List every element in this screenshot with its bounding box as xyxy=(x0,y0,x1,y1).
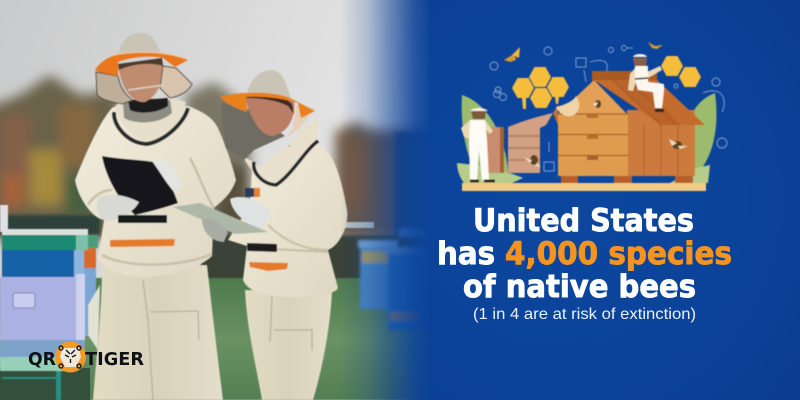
headline xyxy=(437,203,732,305)
illustration: bee flying top left xyxy=(504,47,520,62)
headline line 2: 4,000 species: 4,000 species xyxy=(505,236,732,272)
standing keeper: arms xyxy=(461,120,493,140)
hive: flap xyxy=(553,105,558,125)
woman: collar band xyxy=(254,141,318,185)
subheading: (1 in 4 are at risk of extinction) xyxy=(473,306,696,323)
man: orange strip xyxy=(110,239,175,247)
headline line 3: of native bees xyxy=(463,269,696,305)
standing keeper: overalls xyxy=(469,120,489,180)
illustration: line icons xyxy=(490,46,727,171)
illustration: ground platform xyxy=(462,183,706,191)
illustration: opened hive boxes xyxy=(487,113,553,173)
illustration: bee on hive xyxy=(669,139,688,149)
roof keeper: overalls xyxy=(635,66,664,108)
woman: neck skin xyxy=(288,144,291,147)
man: black collar band xyxy=(114,108,188,144)
logo: wordmark TIGER: TIGER xyxy=(85,349,144,370)
woman: jacket xyxy=(228,143,347,297)
man: jacket xyxy=(75,106,236,277)
roof keeper: veil and face xyxy=(633,58,647,68)
woman: veil xyxy=(222,103,285,160)
illustration: hive xyxy=(553,71,705,183)
man: trousers xyxy=(93,265,223,400)
woman: trousers xyxy=(245,290,332,400)
woman: chest pen pocket xyxy=(245,188,258,197)
man: hat brim xyxy=(95,52,188,76)
illustration: honey curl xyxy=(556,96,579,116)
man: left glove xyxy=(152,159,182,194)
logo: orange tiger badge xyxy=(55,342,86,372)
hive: roof xyxy=(594,80,705,125)
man: face xyxy=(118,62,163,102)
person behind the man xyxy=(88,285,100,350)
man: hat crown xyxy=(118,32,160,54)
woman in bee suit xyxy=(173,70,347,400)
logo: QR TIGER xyxy=(28,342,144,372)
woman: right glove xyxy=(230,197,270,228)
illustration: bee flying top right xyxy=(648,42,663,49)
hive: legs xyxy=(561,176,578,183)
man: black pocket strip xyxy=(118,215,167,223)
man in bee suit xyxy=(75,33,236,400)
illustration: beekeeper on roof xyxy=(628,54,664,112)
illustration: bee at bottom left xyxy=(524,155,541,167)
man: black clipboard xyxy=(102,156,178,215)
woman: hat brim xyxy=(220,93,315,118)
headline line 1: United States xyxy=(473,203,694,239)
photo: beekeepers in an apiary xyxy=(0,0,450,400)
standing keeper: shoes xyxy=(470,180,495,182)
hive: roof ridge xyxy=(592,71,657,81)
woman: orange strip xyxy=(249,262,288,271)
man: veil xyxy=(96,72,133,104)
woman: face xyxy=(245,97,294,136)
woman: black pocket strip xyxy=(247,243,277,252)
hive: three boxes xyxy=(558,114,628,134)
man: hood and inner neck xyxy=(115,98,186,142)
illustration: honeycomb right xyxy=(661,56,701,87)
illustration: beekeeper standing xyxy=(461,108,495,181)
woman: hat crown xyxy=(247,70,291,98)
illustration: honeycomb left xyxy=(512,67,569,109)
illustration: bee at front xyxy=(593,100,601,108)
man: right glove xyxy=(97,195,139,221)
hive: front gable xyxy=(558,80,627,114)
logo: wordmark QR: QR xyxy=(28,349,56,370)
headline line 2: has: has xyxy=(437,236,495,272)
beehive boxes, right xyxy=(356,227,425,332)
roof keeper: shoe xyxy=(655,109,664,112)
woman: left glove xyxy=(202,218,228,242)
standing keeper: head xyxy=(471,111,486,119)
illustration: beehive scene xyxy=(457,42,727,191)
photo background: sky, trees and grass xyxy=(0,0,450,400)
hive: side wall xyxy=(627,110,695,176)
beehive boxes, left xyxy=(0,205,98,400)
woman: hood xyxy=(244,118,318,184)
woman: grey clipboard xyxy=(173,203,268,234)
illustration: leaves xyxy=(457,93,716,183)
roof keeper: arms xyxy=(628,68,637,91)
